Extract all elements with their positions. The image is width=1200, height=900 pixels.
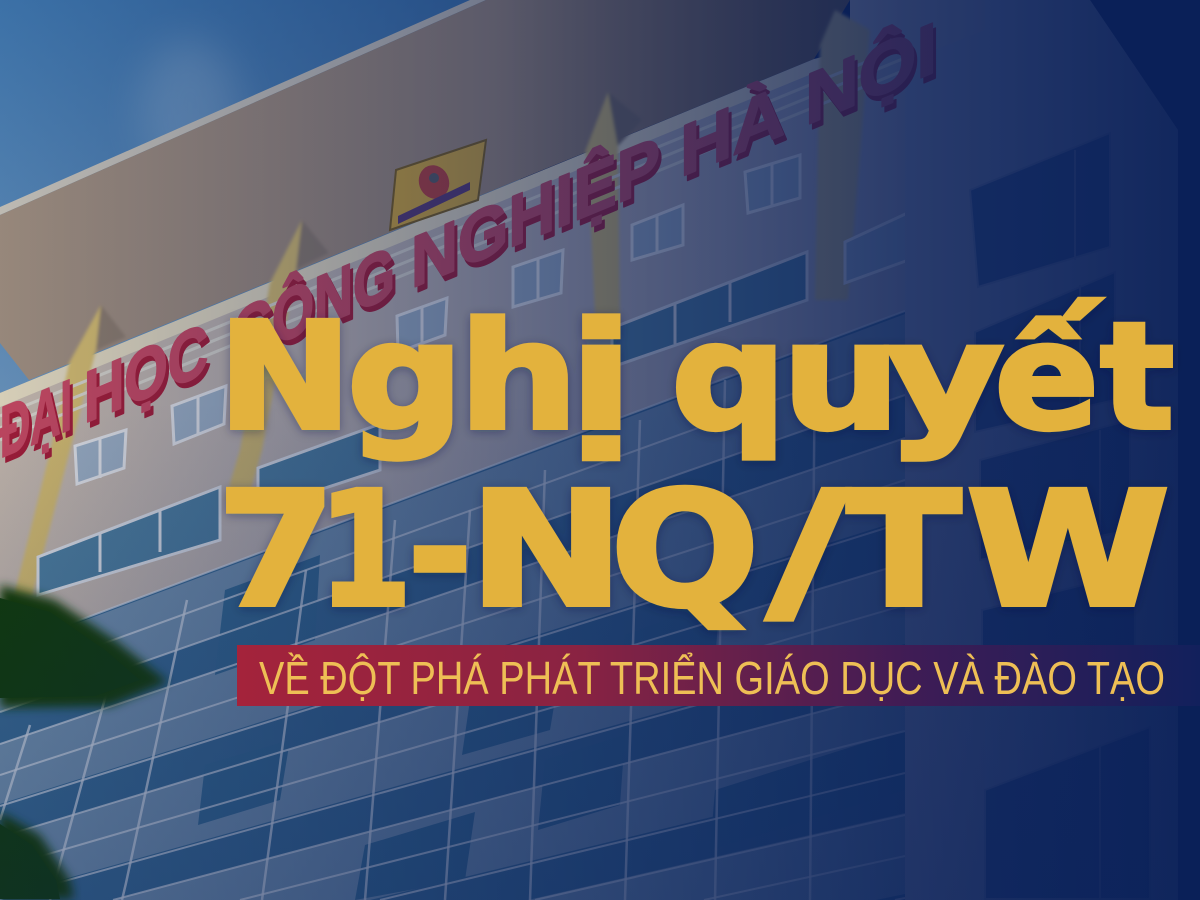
leaves <box>0 585 168 899</box>
title line 2: - <box>408 458 472 642</box>
roof top edge <box>0 0 486 215</box>
sign face: NGHIỆP <box>411 120 660 304</box>
title <box>217 292 1174 642</box>
title line 2: N <box>469 458 624 642</box>
title line 2: T <box>847 458 961 642</box>
concrete column <box>905 30 985 900</box>
parapet cream band <box>0 50 850 407</box>
window glass patches <box>198 555 905 900</box>
sign face: CÔNG <box>233 230 395 377</box>
sign face: HÀ <box>680 69 785 193</box>
sign face: NỘI <box>805 6 937 141</box>
sign shadow: NGHIỆP <box>414 125 663 309</box>
roof soffit <box>0 0 850 380</box>
subtitle band <box>237 645 1200 706</box>
title line 1: h <box>459 292 578 462</box>
title line 1: g <box>347 292 463 462</box>
right face <box>985 0 1178 900</box>
floor lines <box>0 311 905 900</box>
sign shadow <box>3 11 940 478</box>
dark side beyond the building <box>1090 0 1200 900</box>
window row b <box>38 252 807 595</box>
sign shadow: CÔNG <box>236 235 398 382</box>
sky <box>0 0 520 400</box>
sign shadow: HÀ <box>683 74 788 198</box>
title line 1: t <box>1100 292 1174 462</box>
vertical mullions <box>0 350 815 900</box>
sign shadow: ĐẠI <box>3 368 75 478</box>
pillar 2 <box>225 220 329 500</box>
pillar 4 <box>815 10 870 300</box>
cloud <box>140 40 240 180</box>
curtain wall glass <box>0 311 905 900</box>
sign backing stripes <box>0 46 905 440</box>
spandrel bands <box>0 314 905 900</box>
pillar 3 <box>585 92 642 338</box>
title line 1: ị <box>570 292 633 462</box>
title line 1: ế <box>995 292 1101 462</box>
sign face: HỌC <box>84 307 208 439</box>
title line 1: y <box>886 292 1004 462</box>
title line 1: q <box>672 292 786 462</box>
sign face: ĐẠI <box>0 363 72 473</box>
yellow pillars <box>14 10 870 596</box>
title line 1: u <box>782 292 900 462</box>
logo plaque <box>390 140 486 230</box>
title line 2: / <box>768 458 848 642</box>
small upper windows <box>75 155 914 484</box>
pillar 1 <box>14 305 126 596</box>
title line 2: Q <box>611 458 759 642</box>
sign shadow: NỘI <box>808 11 940 146</box>
sign shadow: HỌC <box>87 312 211 444</box>
title line 2: W <box>966 458 1170 642</box>
title line 1: N <box>218 292 352 462</box>
title line 2: 1 <box>318 458 412 642</box>
sign lettering <box>0 6 940 478</box>
sign face <box>0 6 937 473</box>
bottom shade overlay <box>0 400 1200 900</box>
title line 2: 7 <box>217 458 335 642</box>
right side windows <box>970 133 1150 899</box>
